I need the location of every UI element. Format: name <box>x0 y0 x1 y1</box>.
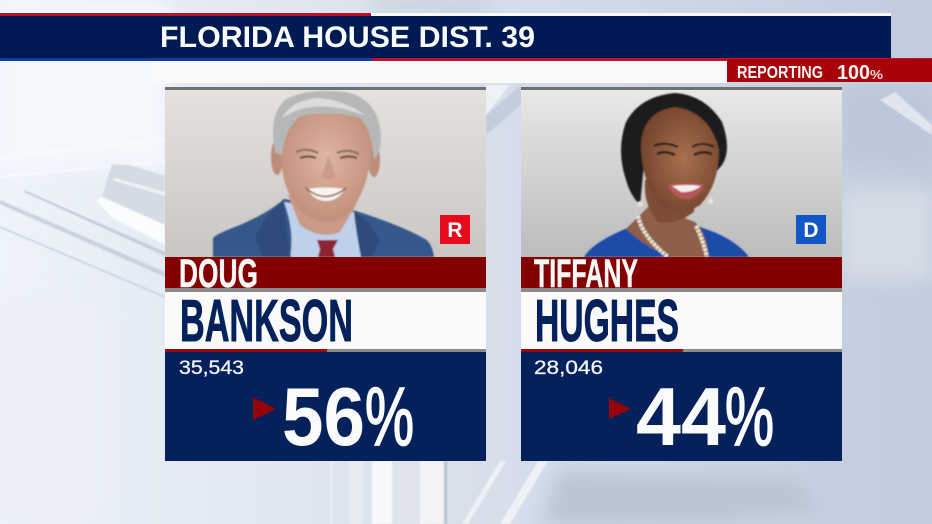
first name bar <box>521 252 842 296</box>
winner arrow <box>609 398 631 419</box>
percentage: 44 <box>636 370 726 463</box>
white strip under banner <box>152 61 727 83</box>
reporting badge: % <box>870 67 883 82</box>
percentage <box>282 370 414 463</box>
first name bar: DOUG <box>179 252 258 296</box>
last name bar: HUGHES <box>535 288 679 354</box>
photo: Tiffany Hughes <box>521 90 842 257</box>
results block <box>165 349 486 463</box>
percentage <box>636 370 774 463</box>
first name bar <box>165 252 486 296</box>
reporting badge: 100 <box>837 62 870 84</box>
party badge: D: D <box>803 219 819 242</box>
panel: Tiffany Hughes <box>521 87 842 463</box>
first name bar: TIFFANY <box>534 252 638 296</box>
photo: Doug Bankson <box>165 90 486 257</box>
percentage: 56 <box>282 370 365 463</box>
vote count: 28,046 <box>534 357 603 379</box>
reporting badge: REPORTING <box>737 62 823 82</box>
party badge: R <box>440 215 470 244</box>
results block <box>521 349 842 463</box>
reporting badge <box>727 59 932 84</box>
party badge: R: R <box>447 219 463 242</box>
vote count: 35,543 <box>179 357 244 379</box>
panel: Doug Bankson <box>165 87 486 463</box>
party badge: D <box>796 215 826 244</box>
percentage: % <box>725 370 774 463</box>
last name bar: BANKSON <box>180 288 353 354</box>
title: FLORIDA HOUSE DIST. 39 <box>160 21 535 54</box>
percentage: % <box>365 370 414 463</box>
headline banner <box>0 13 932 61</box>
winner arrow <box>253 397 276 420</box>
